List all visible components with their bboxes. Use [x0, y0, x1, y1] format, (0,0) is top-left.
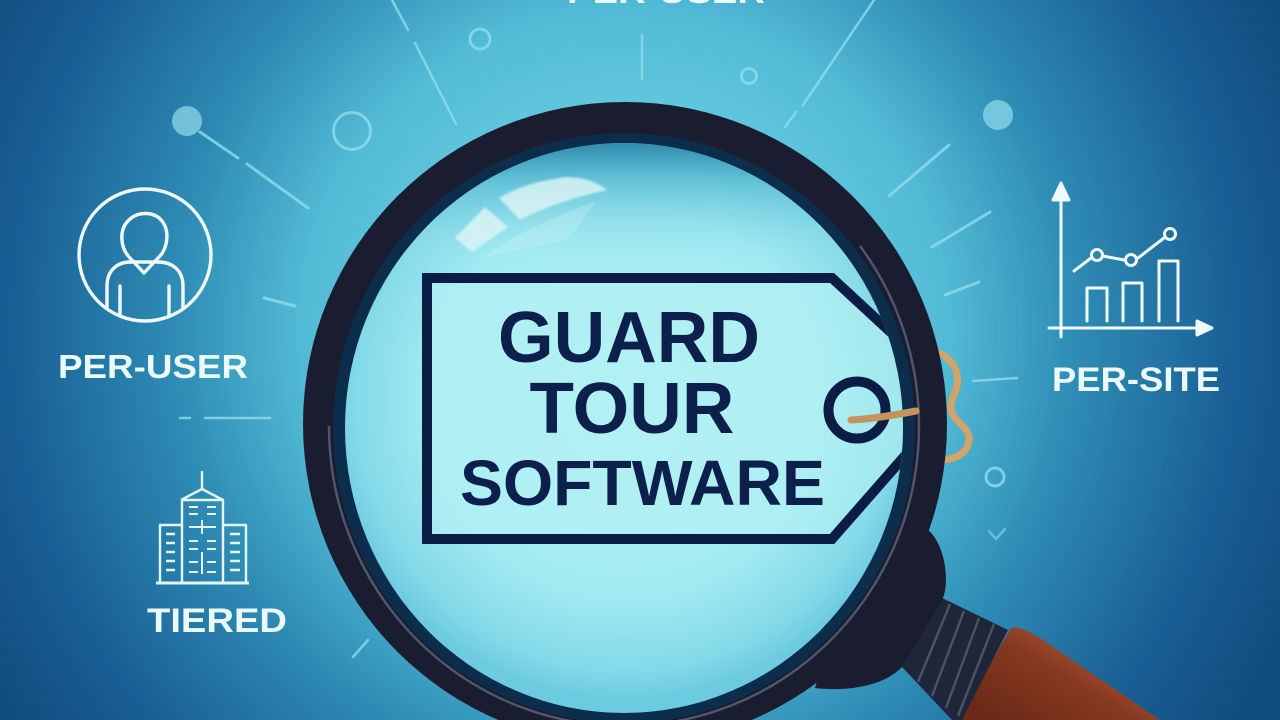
handle: collar	[815, 530, 946, 689]
tag outline	[427, 278, 910, 539]
magnifier rim	[303, 102, 947, 720]
tag title: SOFTWARE	[460, 447, 825, 519]
magnifier lens	[345, 143, 903, 713]
tag hole	[828, 382, 886, 438]
magnifying glass handle	[815, 530, 1160, 720]
tag string through hole	[851, 411, 916, 420]
label: PER-SITE: PER-SITE	[1052, 361, 1220, 399]
icon: person in circle	[79, 189, 211, 321]
label: TIERED: TIERED	[147, 602, 287, 640]
handle: wooden grip	[958, 628, 1160, 720]
tag title: GUARD	[498, 298, 760, 378]
label: PER-USER: PER-USER	[58, 348, 248, 385]
price tag clipped by lens	[427, 278, 910, 539]
tag title: TOUR	[530, 369, 734, 449]
tag title	[460, 298, 825, 519]
icon: growth chart	[1049, 183, 1212, 337]
decorative rays and circles	[172, 0, 1017, 657]
icon: tag string behind rim	[938, 353, 969, 460]
lens glare	[455, 177, 607, 252]
handle: ribbed neck	[902, 598, 1008, 720]
icon: office building	[156, 471, 249, 583]
